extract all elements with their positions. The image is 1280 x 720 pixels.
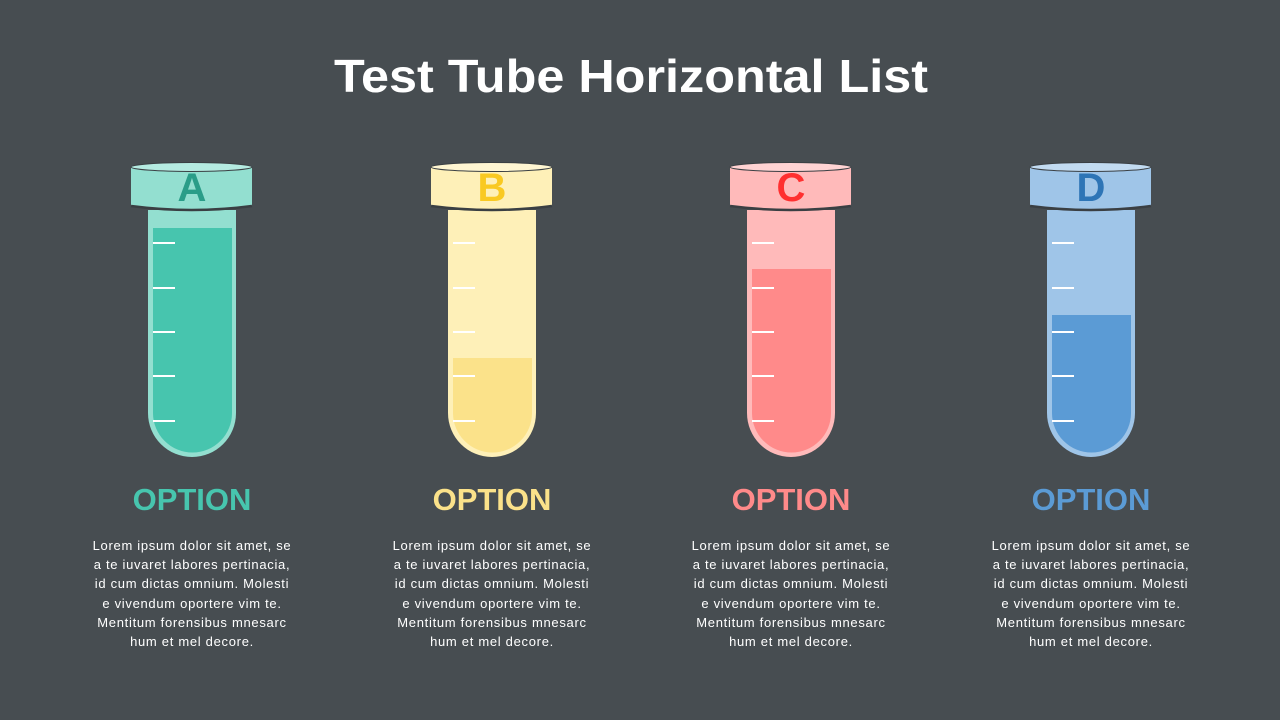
text block B: e vivendum oportere vim te. <box>402 596 582 611</box>
tube C <box>730 162 851 457</box>
text block D: Lorem ipsum dolor sit amet, se <box>992 538 1190 553</box>
option heading B: OPTION <box>433 482 551 517</box>
text block C: id cum dictas omnium. Molesti <box>694 576 888 591</box>
text block D: e vivendum oportere vim te. <box>1001 596 1181 611</box>
text block A <box>93 538 291 649</box>
tube C: C <box>777 166 805 210</box>
text block D: hum et mel decore. <box>1029 634 1153 649</box>
tube B: B <box>478 166 506 210</box>
text block C: hum et mel decore. <box>729 634 853 649</box>
tube D: D <box>1077 166 1105 210</box>
text block B: a te iuvaret labores pertinacia, <box>394 557 590 572</box>
text block B: id cum dictas omnium. Molesti <box>395 576 589 591</box>
text block C: Lorem ipsum dolor sit amet, se <box>692 538 890 553</box>
text block C: Mentitum forensibus mnesarc <box>696 615 886 630</box>
panel: D <box>992 162 1190 649</box>
tube A <box>131 162 252 457</box>
tube D <box>1030 162 1151 457</box>
text block D <box>992 538 1190 649</box>
option heading C: OPTION <box>732 482 850 517</box>
text block C: a te iuvaret labores pertinacia, <box>693 557 889 572</box>
text block B <box>393 538 591 649</box>
tube B <box>431 162 552 457</box>
text block A: Lorem ipsum dolor sit amet, se <box>93 538 291 553</box>
option heading A: OPTION <box>133 482 251 517</box>
panel: C <box>692 162 890 649</box>
tube A: A <box>178 166 206 210</box>
text block A: e vivendum oportere vim te. <box>102 596 282 611</box>
text block D: a te iuvaret labores pertinacia, <box>993 557 1189 572</box>
text block A: hum et mel decore. <box>130 634 254 649</box>
title: Test Tube Horizontal List <box>334 50 928 102</box>
text block A: a te iuvaret labores pertinacia, <box>94 557 290 572</box>
text block A: id cum dictas omnium. Molesti <box>95 576 289 591</box>
text block B: Lorem ipsum dolor sit amet, se <box>393 538 591 553</box>
option heading D: OPTION <box>1032 482 1150 517</box>
text block C <box>692 538 890 649</box>
text block D: Mentitum forensibus mnesarc <box>996 615 1186 630</box>
text block C: e vivendum oportere vim te. <box>701 596 881 611</box>
text block A: Mentitum forensibus mnesarc <box>97 615 287 630</box>
text block B: Mentitum forensibus mnesarc <box>397 615 587 630</box>
text block B: hum et mel decore. <box>430 634 554 649</box>
panel: B <box>393 162 591 649</box>
text block D: id cum dictas omnium. Molesti <box>994 576 1188 591</box>
panel: A <box>93 162 291 649</box>
